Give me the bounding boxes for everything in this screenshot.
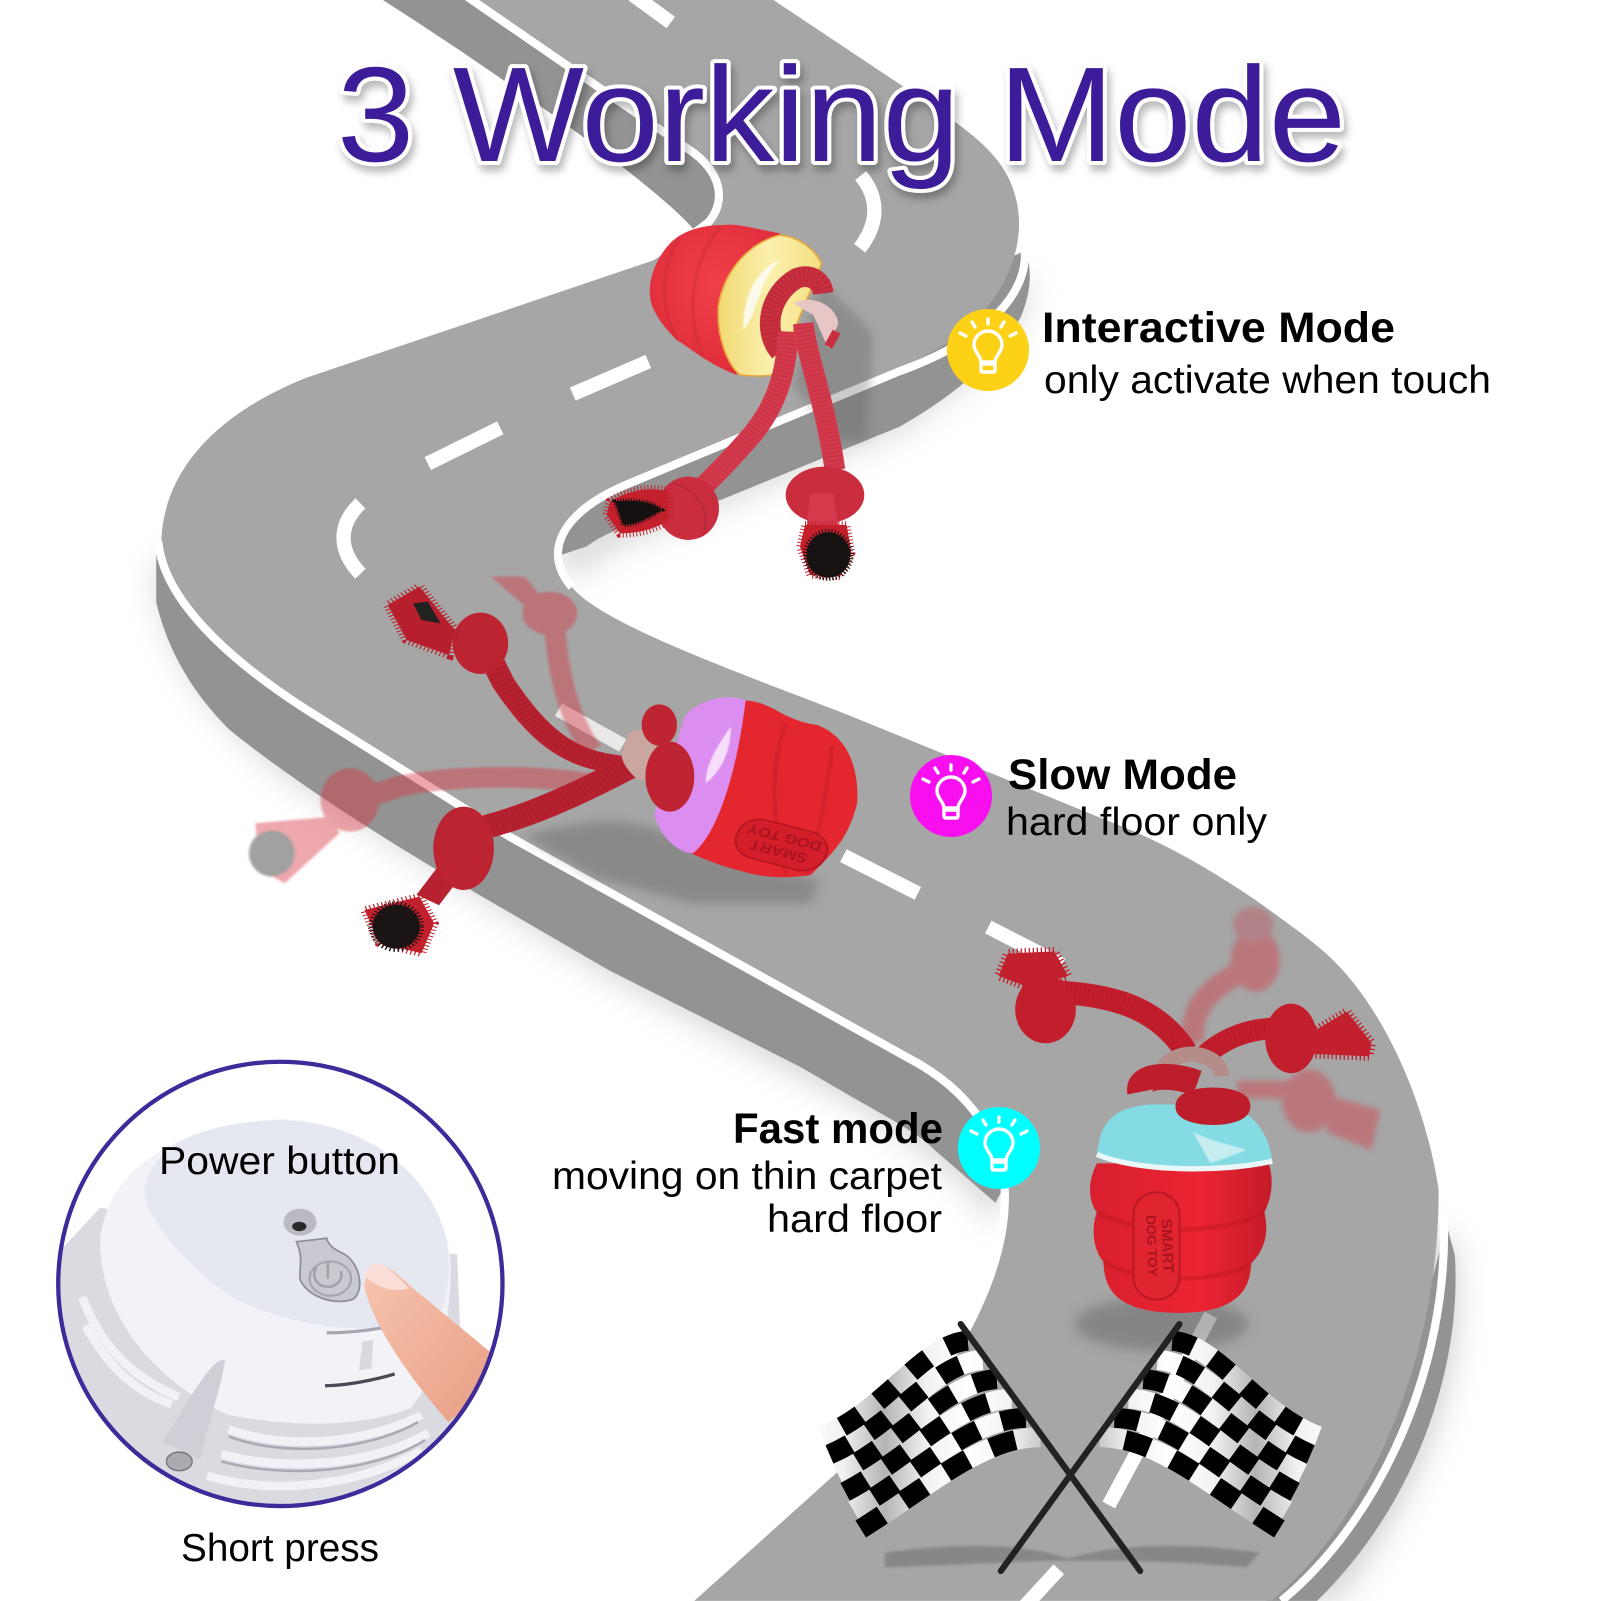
top disc	[145, 1120, 449, 1329]
red body	[1090, 1163, 1272, 1313]
power button	[296, 1238, 360, 1301]
toy: interactive mode yellow	[607, 225, 873, 578]
slots	[325, 1327, 395, 1386]
icon: yellow bulb	[947, 309, 1029, 391]
brand plate	[1133, 1192, 1179, 1300]
translucent ring	[793, 300, 838, 348]
rope left with knot	[703, 332, 788, 487]
tassel left	[999, 951, 1068, 987]
rope right with knot	[1204, 1028, 1296, 1056]
label: slow mode: hard floor only	[1006, 801, 1268, 844]
rope loops	[642, 704, 694, 812]
label: interactive mode	[1042, 304, 1491, 402]
label: short press: Short press	[181, 1527, 379, 1570]
rope loops	[1140, 1077, 1241, 1115]
translucent ring	[621, 730, 656, 782]
yellow light cap	[718, 235, 822, 376]
rope lower with knot	[428, 767, 630, 900]
motion ghost ropes	[249, 577, 592, 883]
label: slow mode	[1006, 751, 1268, 844]
toy shadow	[793, 280, 873, 440]
toy shadow	[525, 822, 819, 903]
label: slow mode: Slow Mode	[1008, 751, 1237, 799]
brand plate: SMART	[1158, 1219, 1176, 1274]
label: interactive mode: only activate when touch	[1044, 359, 1491, 402]
label: fast mode: moving on thin carpet	[552, 1155, 942, 1198]
rope right with knot	[803, 323, 835, 470]
speaker hole	[284, 1209, 316, 1236]
tassel right	[1313, 1012, 1371, 1056]
base grooves	[82, 1297, 429, 1486]
purple light cap	[654, 697, 746, 853]
brand plate on body: DOG TOY	[745, 820, 824, 854]
toy shadow	[1075, 1297, 1249, 1351]
toy: slow mode purple	[249, 577, 857, 953]
road surface	[161, 0, 1439, 1601]
label: fast mode: hard floor	[767, 1198, 942, 1241]
motion ghost ropes	[1192, 907, 1380, 1150]
label: interactive mode: Interactive Mode	[1042, 304, 1395, 352]
right flag	[1100, 1341, 1318, 1529]
finger	[364, 1264, 493, 1422]
brand plate on body	[730, 815, 833, 875]
label: power button: Power button	[159, 1140, 400, 1183]
panel: power button inset	[54, 1062, 502, 1511]
left flag	[822, 1341, 1041, 1529]
device base	[54, 1208, 464, 1511]
brand plate on body: SMART	[747, 836, 810, 865]
tassel left	[607, 489, 668, 533]
fin	[162, 1360, 225, 1460]
screw	[166, 1452, 192, 1471]
icon: cyan bulb	[958, 1107, 1040, 1189]
icon: magenta bulb	[910, 755, 992, 837]
tassel upper	[388, 587, 455, 655]
checkered flags	[822, 1324, 1318, 1571]
red body	[691, 701, 857, 877]
rope loop	[770, 277, 823, 352]
inset ring	[58, 1062, 502, 1506]
label: fast mode: Fast mode	[733, 1105, 943, 1153]
road centre dashes	[344, 0, 1211, 1601]
rope left with knot	[1046, 992, 1186, 1052]
toy: fast mode cyan	[999, 907, 1380, 1351]
title: 3 Working Mode	[337, 39, 1346, 190]
brand plate: DOG TOY	[1143, 1215, 1160, 1277]
label: fast mode	[552, 1105, 943, 1241]
device illustration	[54, 1119, 493, 1511]
tassel lower	[365, 897, 434, 953]
translucent ring	[1164, 1054, 1222, 1076]
tassel right	[800, 525, 852, 577]
device dome	[100, 1119, 451, 1424]
rope upper with knot	[487, 643, 621, 765]
red body	[650, 225, 780, 375]
cyan light cap	[1097, 1104, 1272, 1169]
flag shadow	[885, 1546, 1260, 1567]
flag poles	[961, 1324, 1179, 1571]
